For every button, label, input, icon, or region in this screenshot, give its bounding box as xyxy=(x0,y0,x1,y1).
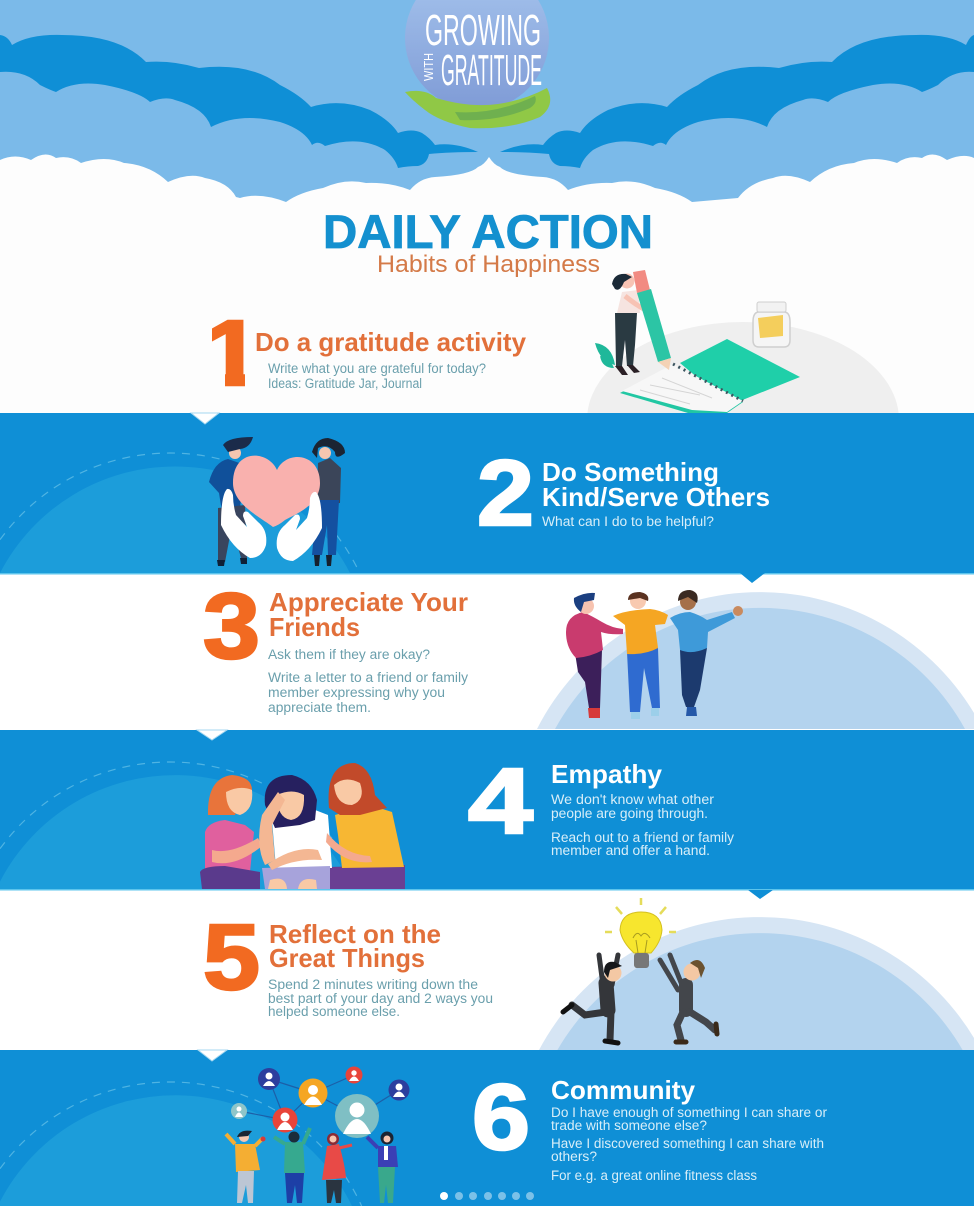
notch xyxy=(198,1050,227,1061)
illustration: notebook, pencil, jar xyxy=(587,270,899,413)
leaf base xyxy=(405,88,550,128)
text 3: member expressing why you xyxy=(268,685,445,700)
notebook xyxy=(620,339,800,413)
carousel dots xyxy=(440,1192,534,1200)
numeral 2: 2 xyxy=(477,441,534,545)
title 3: Appreciate Your xyxy=(269,587,468,617)
notch xyxy=(191,413,219,424)
arc decoration xyxy=(0,762,363,889)
text 6: trade with someone else? xyxy=(551,1118,707,1133)
numeral 4: 4 xyxy=(468,749,533,853)
person red xyxy=(322,1133,352,1203)
text 1: Write what you are grateful for today? xyxy=(268,361,486,376)
leaves xyxy=(595,343,615,368)
illustration: light bulb and two men xyxy=(563,898,717,1043)
text 4: Reach out to a friend or family xyxy=(551,830,734,845)
numeral 6: 6 xyxy=(472,1065,530,1169)
header: sky and clouds xyxy=(0,0,974,413)
network nodes xyxy=(231,1066,410,1138)
text 6: For e.g. a great online fitness class xyxy=(551,1168,757,1183)
text: GRATITUDE xyxy=(441,46,542,95)
illustration: people holding heart xyxy=(209,437,345,566)
text 4: people are going through. xyxy=(551,806,708,821)
title 3 xyxy=(269,587,468,642)
left dark cloud xyxy=(0,35,478,168)
illustration: network and people xyxy=(226,1066,410,1203)
heart xyxy=(233,456,320,527)
arc decoration xyxy=(537,592,974,729)
network lines xyxy=(239,1075,399,1120)
person yellow xyxy=(226,1131,266,1203)
title 5: Great Things xyxy=(269,943,425,973)
panel 4: Empathy xyxy=(0,730,974,890)
subheading: Habits of Happiness xyxy=(377,251,600,278)
numeral 5: 5 xyxy=(203,905,260,1009)
hands xyxy=(221,489,322,561)
title 2: Kind/Serve Others xyxy=(542,482,770,512)
numeral 3: 3 xyxy=(203,574,260,678)
text 3: Ask them if they are okay? xyxy=(268,647,430,662)
title 3: Friends xyxy=(269,612,360,642)
text 3: appreciate them. xyxy=(268,700,371,715)
panel 6: Community xyxy=(0,1050,974,1206)
right dark cloud xyxy=(500,35,974,168)
jar xyxy=(753,302,790,347)
text 6: others? xyxy=(551,1149,597,1164)
title 4: Empathy xyxy=(551,759,663,789)
logo lettering: GROWING xyxy=(425,6,541,55)
text 5 xyxy=(268,977,493,1019)
arc decoration xyxy=(0,453,360,573)
title 6: Community xyxy=(551,1075,696,1105)
notch xyxy=(197,730,227,740)
white cloud edge xyxy=(0,154,974,413)
bulb xyxy=(605,898,676,968)
panel 1: Do a gratitude activity xyxy=(202,205,899,413)
man left head xyxy=(604,962,622,982)
text 2: What can I do to be helpful? xyxy=(542,514,714,529)
text 3 xyxy=(268,647,468,715)
text 5: Spend 2 minutes writing down the xyxy=(268,977,478,992)
text 6: Do I have enough of something I can share or xyxy=(551,1105,827,1120)
logo lettering xyxy=(421,6,542,95)
title 5: Reflect on the xyxy=(269,919,441,949)
panel 5: Reflect on the Great Things xyxy=(203,890,974,1050)
text 6: Have I discovered something I can share with xyxy=(551,1136,824,1151)
title 2: Do Something xyxy=(542,457,719,487)
arc decoration xyxy=(539,917,974,1050)
panel 3: Appreciate Your Friends xyxy=(203,573,974,729)
notch xyxy=(740,573,765,583)
text 5: helped someone else. xyxy=(268,1004,400,1019)
text 4: We don't know what other xyxy=(551,792,715,807)
text 1 xyxy=(268,361,486,391)
notch xyxy=(748,890,773,899)
text 6 xyxy=(551,1105,827,1183)
title 2 xyxy=(542,457,770,512)
heading: Daily Action: DAILY ACTION xyxy=(323,205,653,258)
illustration: three women comforting xyxy=(200,763,405,889)
person blue xyxy=(367,1132,398,1203)
man left xyxy=(563,955,618,1043)
illustration: three friends xyxy=(566,590,743,719)
arc decoration xyxy=(0,1082,362,1206)
logo: Growing with Gratitude xyxy=(405,0,550,128)
text 3: Write a letter to a friend or family xyxy=(268,670,468,685)
numeral 1: 1 xyxy=(202,301,262,405)
title 5 xyxy=(269,919,441,973)
rainbow and sun xyxy=(419,0,531,13)
man right xyxy=(660,955,717,1042)
logo lettering: WITH xyxy=(421,53,436,81)
text 4: member and offer a hand. xyxy=(551,843,710,858)
text 5: best part of your day and 2 ways you xyxy=(268,991,493,1006)
title 1: Do a gratitude activity xyxy=(255,327,527,357)
man right head xyxy=(684,960,705,980)
person green xyxy=(274,1128,310,1203)
text 1: Ideas: Gratitude Jar, Journal xyxy=(268,376,422,391)
pencil xyxy=(633,270,671,370)
text 4 xyxy=(551,792,734,858)
panel 2: Do Something Kind xyxy=(0,413,974,574)
woman xyxy=(612,274,650,375)
